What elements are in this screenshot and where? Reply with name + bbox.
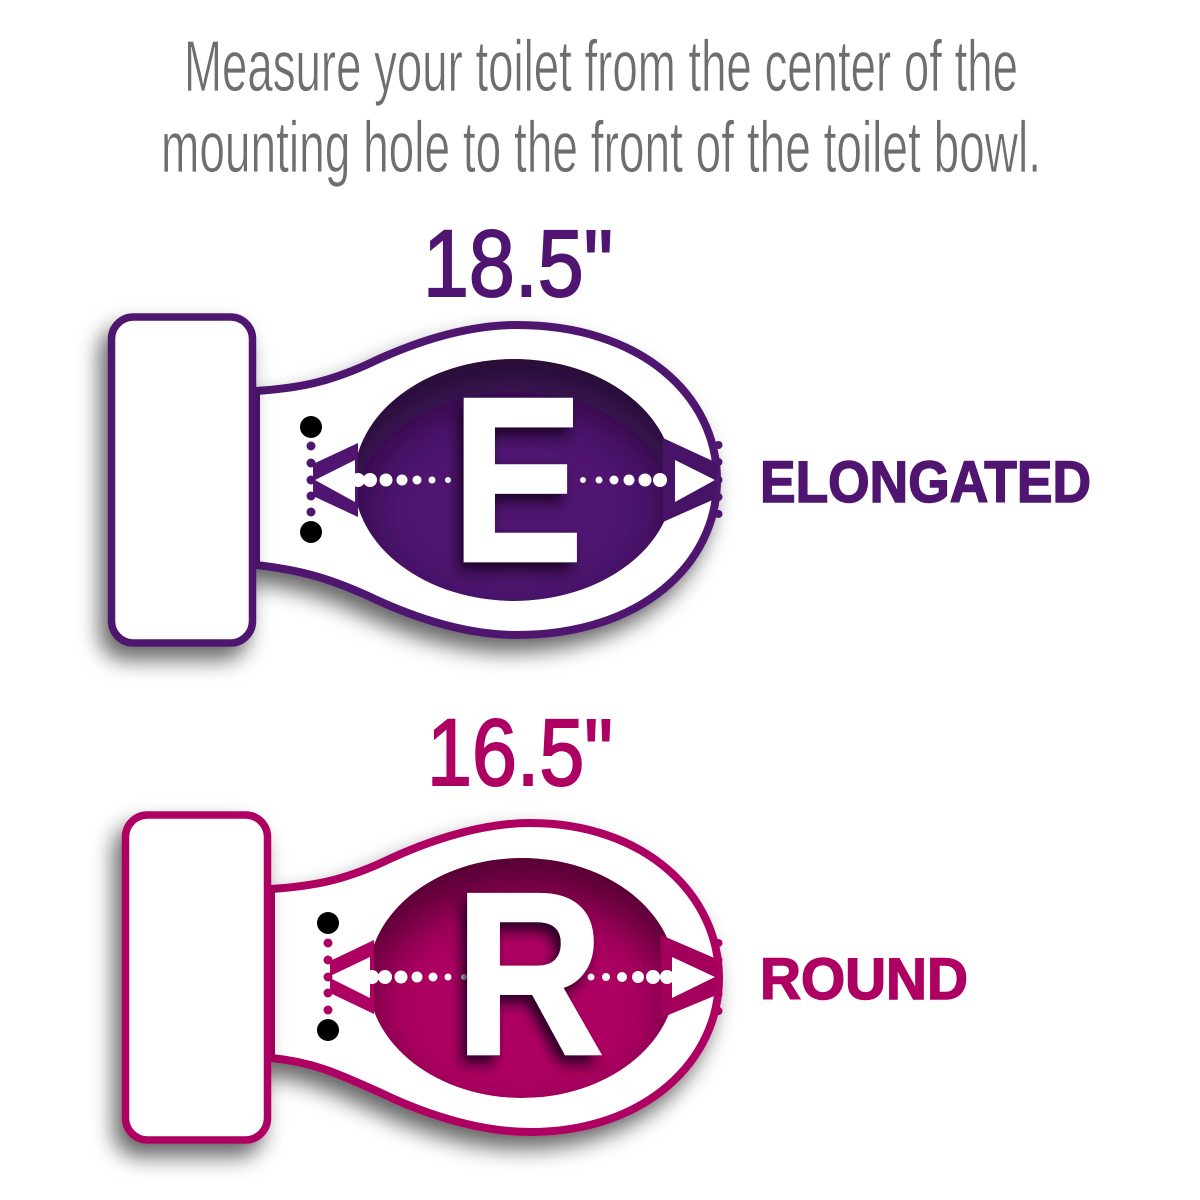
title — [161, 27, 1041, 188]
measure dots horizontal — [365, 970, 674, 984]
diagram: elongated toilet — [84, 310, 729, 676]
tank — [112, 317, 252, 643]
bowl opening — [374, 858, 669, 1098]
right arrow — [663, 438, 717, 522]
left arrow — [313, 443, 358, 517]
right arrow — [661, 935, 719, 1018]
tank — [126, 815, 268, 1140]
diagram: round toilet — [98, 808, 731, 1173]
front dots — [714, 441, 722, 518]
bowl opening — [358, 359, 664, 601]
mounting holes — [317, 912, 339, 1041]
measure dots horizontal — [351, 473, 667, 487]
mounting holes — [300, 416, 322, 543]
seat outline — [256, 325, 717, 635]
measurement: 18.5 inches: 18.5" — [423, 211, 613, 317]
left arrow — [328, 940, 374, 1014]
label: elongated: ELONGATED — [760, 450, 1091, 515]
label: round: ROUND — [760, 947, 968, 1012]
seat outline — [271, 823, 719, 1132]
letter E: E — [452, 348, 583, 610]
front dots — [714, 939, 722, 1015]
letter R: R — [455, 845, 603, 1103]
measurement: 16.5 inches: 16.5" — [427, 700, 613, 806]
